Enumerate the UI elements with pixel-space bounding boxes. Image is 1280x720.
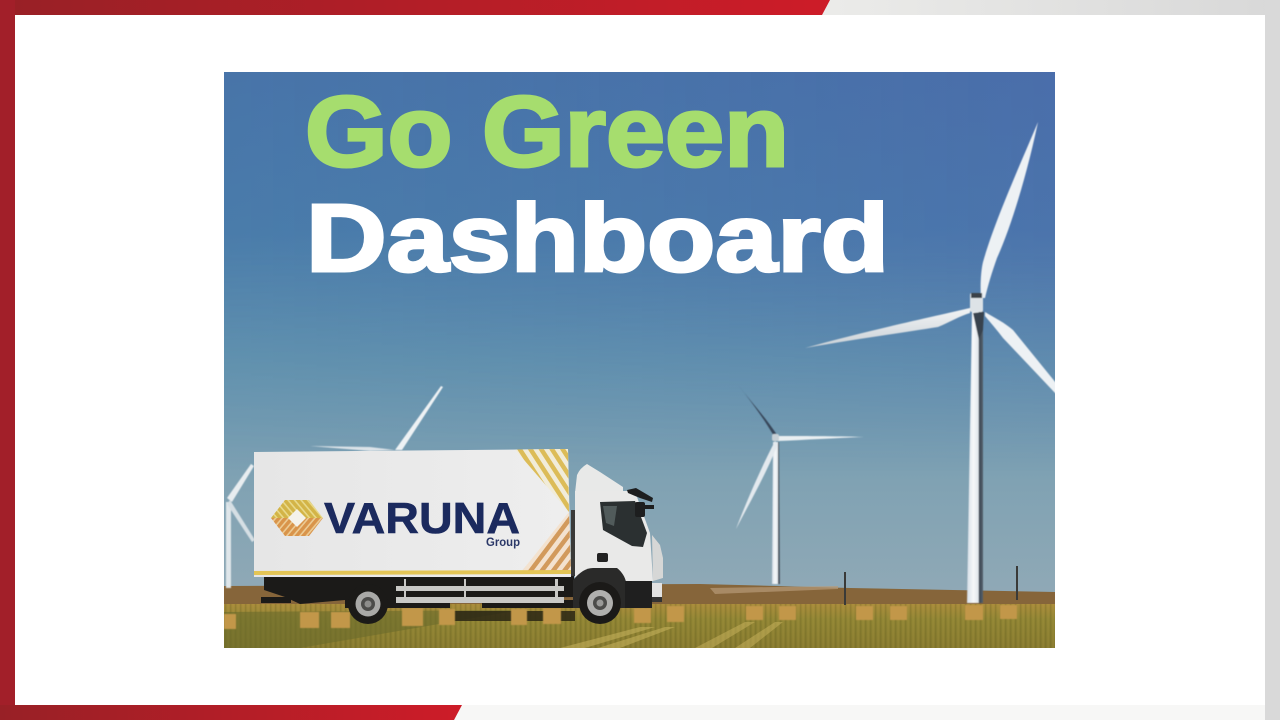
yellow base line (254, 570, 571, 575)
frame: red top band (0, 0, 830, 15)
hay bales (224, 605, 1017, 629)
heading: Go Green: Go Green (305, 76, 789, 188)
sky (224, 72, 1055, 597)
cab (571, 464, 663, 608)
side rails (396, 579, 564, 603)
ground (224, 584, 1055, 648)
frame: light bottom band (450, 705, 1265, 720)
mirror (627, 488, 654, 517)
turbine behind truck (310, 386, 443, 451)
blades (981, 122, 1038, 298)
cab body (575, 491, 653, 581)
rear wheel (348, 592, 388, 624)
front fairing (652, 535, 663, 581)
window (600, 501, 647, 547)
power poles (844, 566, 1018, 605)
tower (967, 310, 983, 603)
large turbine (805, 122, 1056, 603)
truck (254, 449, 663, 624)
heading (305, 76, 889, 292)
heading: Dashboard: Dashboard (306, 185, 889, 292)
bumper (625, 581, 652, 608)
far-left turbine (226, 464, 255, 588)
cargo box (254, 449, 571, 577)
front wheel (579, 582, 621, 624)
roof deflector (575, 464, 623, 491)
frame: red bottom band (0, 705, 462, 720)
nacelle (970, 293, 983, 312)
frame: grey top band (810, 0, 1280, 15)
logo: Varuna mark (271, 500, 323, 536)
photo panel (224, 72, 1056, 648)
frame: grey right band (1265, 0, 1280, 720)
tower (772, 442, 780, 584)
logo: Group: Group (486, 535, 520, 549)
frame: red left band (0, 0, 15, 720)
wheel arch (573, 568, 626, 608)
small turbine (736, 385, 864, 584)
rear dark panel (571, 510, 575, 576)
chassis (261, 576, 577, 608)
gold stripes (515, 449, 569, 512)
step hatch (597, 553, 608, 562)
blades (746, 395, 776, 434)
logo: VARUNA wordmark: VARUNA (324, 494, 520, 543)
